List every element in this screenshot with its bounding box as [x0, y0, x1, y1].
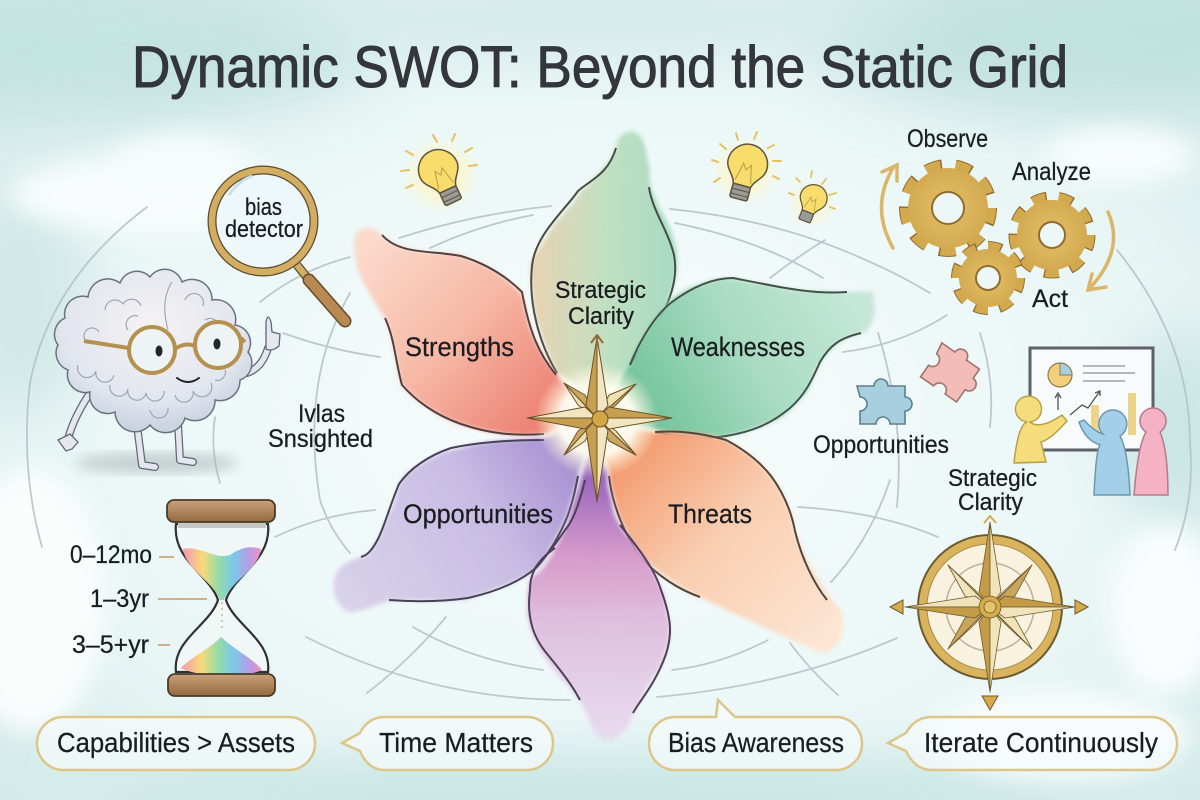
petal: bottom purple [528, 440, 670, 742]
person: pink [1134, 408, 1168, 495]
label: Observe: Observe [907, 125, 988, 153]
callout: Time Matters: Time Matters [379, 727, 533, 758]
label: garbled insight text [268, 400, 373, 453]
icon: puzzle pieces [813, 337, 989, 459]
gear: right [1014, 197, 1090, 273]
label: Strengths: Strengths [405, 332, 514, 362]
icon: light bulb left [401, 134, 477, 211]
petal: Weaknesses [600, 278, 875, 438]
center glow [535, 362, 659, 478]
label: Weaknesses: Weaknesses [671, 332, 805, 362]
petal: Threats [595, 425, 843, 651]
label: Strategic: Strategic [555, 277, 646, 304]
icon: hourglass with time horizons [70, 500, 275, 696]
person: blue [1079, 410, 1130, 495]
callout: Capabilities > Assets: Capabilities > Assets [57, 727, 295, 758]
callout: Iterate Continuously: Iterate Continuously [924, 727, 1158, 758]
label: detector: detector [225, 216, 303, 243]
title: Dynamic SWOT: Beyond the Static Grid [132, 35, 1068, 100]
label: 3-5+yr: 3–5+yr [72, 631, 149, 659]
icon: light bulb right small [789, 171, 836, 226]
label: garbled insight text: Snsighted [268, 425, 373, 453]
petal: Opportunities [332, 420, 595, 612]
label: Analyze: Analyze [1012, 158, 1091, 186]
gear: small [956, 246, 1020, 310]
callout: Iterate Continuously [888, 717, 1177, 770]
callout: Bias Awareness [649, 700, 862, 770]
callout: Bias Awareness: Bias Awareness [668, 727, 844, 758]
arrow: loop down [1088, 212, 1114, 290]
icon: gears with loop [882, 125, 1114, 313]
icon: team at chart board [1014, 348, 1168, 495]
gear: large [905, 165, 991, 251]
icon: central compass star [527, 335, 672, 502]
icon: compass with label [890, 465, 1088, 710]
person: yellow [1014, 396, 1067, 463]
label: 0-12mo: 0–12mo [70, 541, 152, 569]
panel: SWOT flower [332, 133, 875, 742]
label: Threats: Threats [668, 499, 752, 529]
label: Clarity side: Clarity [958, 489, 1023, 516]
tick lines [158, 557, 207, 645]
label: Act: Act [1032, 285, 1068, 313]
arrow: loop up [882, 165, 897, 248]
petal: Strengths [354, 228, 590, 435]
callout: Time Matters [342, 717, 553, 770]
icon: brain character [55, 269, 280, 474]
petal: top green [531, 133, 677, 400]
orbit guide lines [27, 206, 1191, 700]
label: Clarity: Clarity [568, 303, 634, 330]
label: garbled insight text: Ivlas [298, 400, 345, 428]
icon: magnifying glass bias detector [212, 170, 345, 321]
icon: light bulb right large [712, 132, 781, 204]
label: Opportunities: Opportunities [403, 499, 553, 529]
label: Strategic side: Strategic [948, 465, 1037, 492]
brain glasses [84, 322, 245, 373]
label: 1-3yr: 1–3yr [90, 585, 149, 613]
label: bias: bias [245, 194, 282, 221]
label: Opportunities side: Opportunities [813, 431, 949, 459]
callout: Capabilities > Assets [37, 717, 315, 770]
